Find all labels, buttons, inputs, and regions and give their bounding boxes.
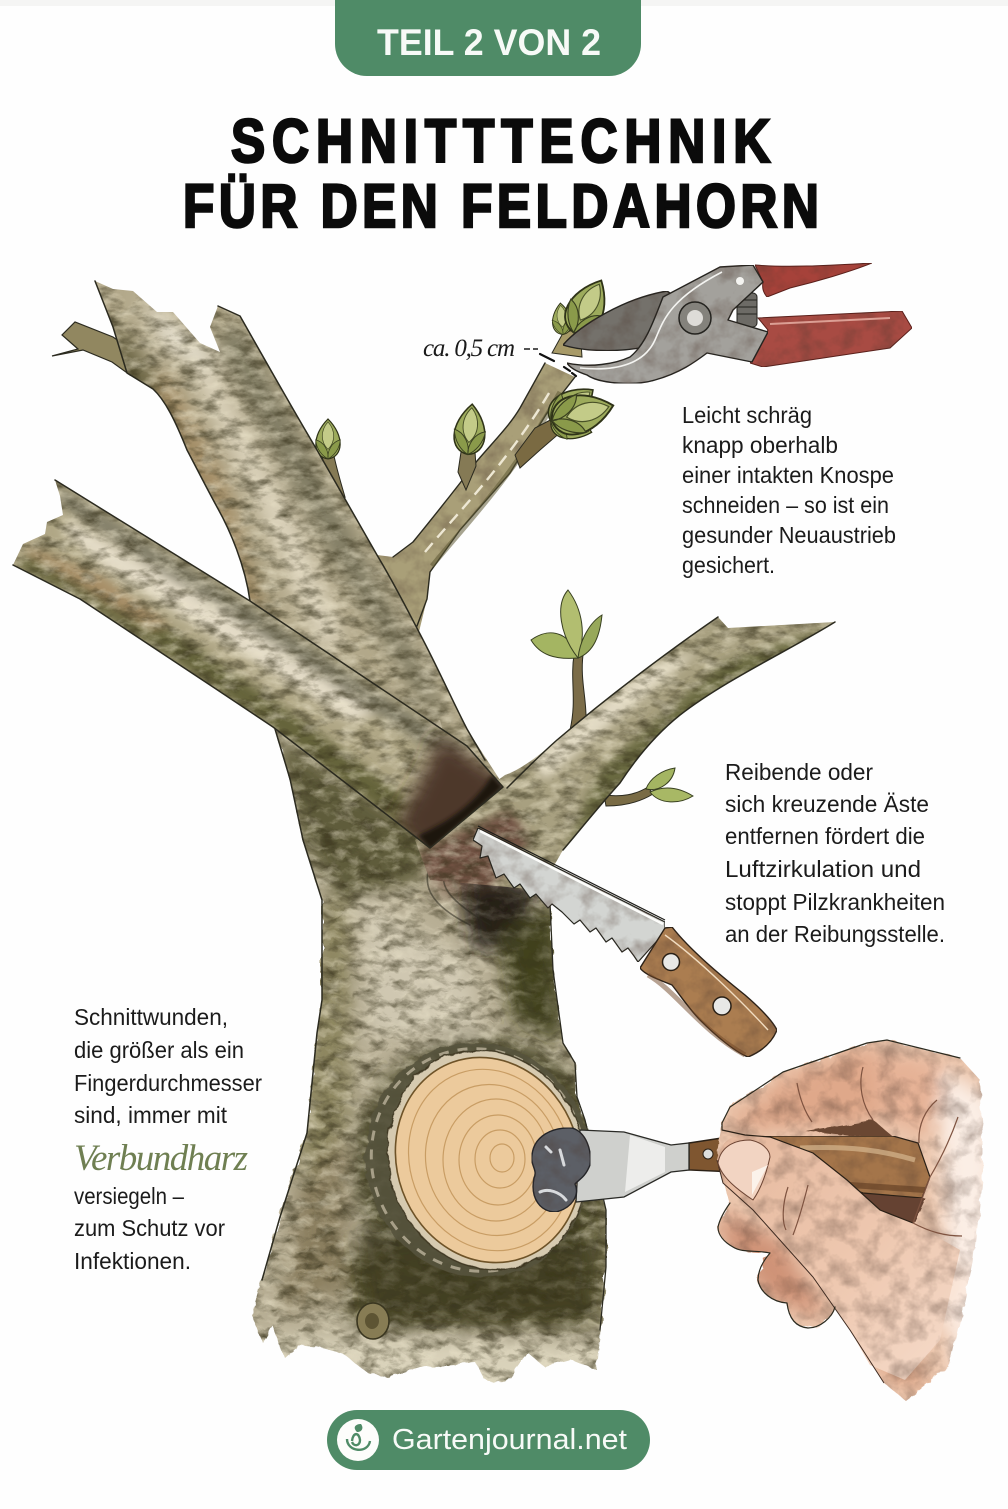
finger outlines and creases [718, 1040, 960, 1328]
dark moss overlay [355, 875, 590, 1320]
red lower handle [750, 311, 912, 367]
text block: saw tip: stoppt Pilzkrankheiten [725, 889, 945, 915]
text block: saw tip: Reibende oder [725, 759, 873, 785]
illustration: trunk [240, 720, 620, 1400]
text block: wound sealing tip [74, 1004, 262, 1274]
text block: wound sealing tip: sind, immer mit [74, 1102, 227, 1128]
callus ring [332, 1011, 624, 1309]
text block: saw tip: entfernen fördert die [725, 823, 925, 849]
text block: pruning shears tip: gesichert. [682, 552, 775, 578]
metal body and lower hook [567, 265, 768, 383]
dark pocket below the handle [862, 1194, 926, 1223]
pivot bolt [679, 302, 711, 334]
title [183, 107, 819, 240]
collar swirls [427, 860, 490, 925]
text block: pruning shears tip [682, 402, 896, 578]
measurement: cut distance: ca. 0,5 cm [423, 335, 515, 362]
text block: pruning shears tip: einer intakten Knospe [682, 462, 894, 488]
footer badge: Gartenjournal.net [327, 1410, 650, 1470]
spatula blade [576, 1130, 689, 1202]
illustration: upper left branch [52, 270, 510, 790]
header tab: Teil 2 von 2: TEIL 2 VON 2 [377, 22, 601, 63]
text block: wound sealing tip: versiegeln – [74, 1183, 185, 1209]
text block: pruning shears tip: knapp oberhalb [682, 432, 838, 458]
small side twig on the left branch [52, 322, 135, 375]
illustration: bypass pruning shears [563, 263, 912, 383]
text block: pruning shears tip: schneiden – so ist ein [682, 492, 889, 518]
red upper handle [755, 263, 872, 297]
icon: top buds [551, 302, 573, 335]
icon: sprout logo [337, 1419, 379, 1461]
icon: small bud on branch [316, 419, 340, 459]
icon: right bud cluster [541, 377, 603, 434]
upper blade [563, 291, 680, 351]
text block: wound sealing tip: Fingerdurchmesser [74, 1070, 262, 1096]
cut stub above the gap [552, 328, 582, 357]
text block: wound sealing tip: Infektionen. [74, 1248, 191, 1274]
text block: pruning shears tip: Leicht schräg [682, 402, 812, 428]
thumb [717, 1130, 960, 1383]
illustration: twig with buds [316, 272, 618, 640]
stems of small buds [458, 452, 476, 490]
text block: saw tip: sich kreuzende Äste [725, 791, 929, 817]
old knot [357, 1303, 389, 1339]
illustration: spatula with sealing resin [532, 1128, 735, 1212]
spatula handle [689, 1136, 735, 1172]
measurement: cut distance [423, 335, 576, 376]
footer badge: Gartenjournal.net: Gartenjournal.net [392, 1424, 627, 1456]
text block: pruning shears tip: gesunder Neuaustrieb [682, 522, 896, 548]
saw handle [640, 927, 777, 1057]
text block: saw tip [725, 759, 945, 947]
text block: wound sealing tip: Schnittwunden, [74, 1004, 228, 1030]
icon: leafing bud on right branch [531, 590, 602, 730]
title: SCHNITTTECHNIK [231, 107, 771, 175]
resin blob [532, 1128, 590, 1212]
header tab: Teil 2 von 2 [335, 0, 641, 76]
icon: small twig with two buds [604, 768, 693, 806]
handle part visible within the grip [765, 1136, 930, 1198]
text block: saw tip: Luftzirkulation und [725, 856, 921, 882]
bud knuckle on right [515, 417, 562, 468]
highlighted word: Verbundharz [74, 1138, 248, 1179]
text block: wound sealing tip: zum Schutz vor [74, 1215, 225, 1241]
dark pocket above the handle [806, 1120, 892, 1136]
illustration: folding pruning saw [473, 826, 777, 1057]
thumbnail [718, 1140, 770, 1200]
title: FÜR DEN FELDAHORN [183, 172, 819, 240]
illustration: hand [716, 1039, 984, 1401]
text block: saw tip: an der Reibungsstelle. [725, 921, 945, 947]
text block: wound sealing tip: die größer als ein [74, 1037, 244, 1063]
wood disc with rings [367, 1031, 609, 1289]
spring [737, 293, 757, 327]
illustration: crossing branch [10, 475, 515, 860]
illustration: right branch with small twigs [410, 590, 840, 895]
icon: small bud on twig [452, 403, 488, 456]
illustration: cut wound disc [332, 1011, 624, 1309]
saw blade [473, 828, 665, 962]
